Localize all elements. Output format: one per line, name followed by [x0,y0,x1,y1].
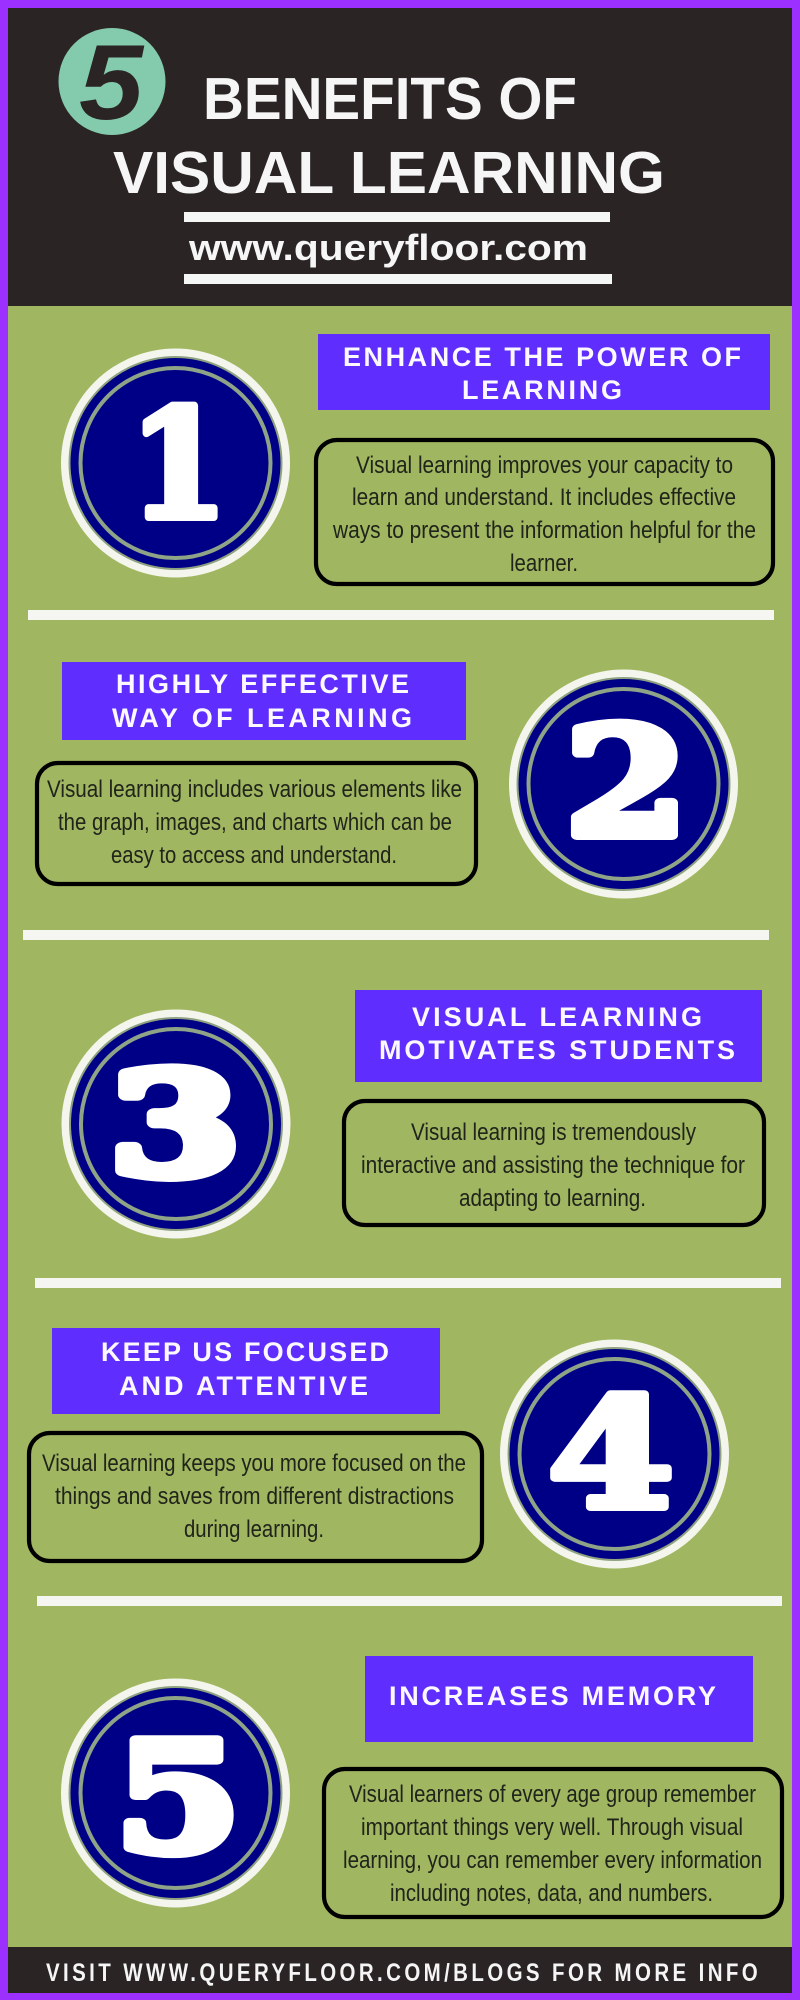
text box 1: Visual learning improves your capacity to [356,452,733,479]
text box 2: Visual learning includes various elements like [47,776,462,803]
number badge 2 [509,670,738,898]
heading 1 [318,334,770,410]
panel: benefit 4 [29,1328,729,1568]
text box 2 [37,763,476,884]
heading 3: MOTIVATES STUDENTS [379,1035,735,1065]
text box 1 [316,440,773,584]
panel: benefit 2 [37,662,738,898]
text box 4: things and saves from different distractions [55,1483,454,1510]
text box 3 [344,1101,764,1225]
text box 4: during learning. [184,1516,324,1543]
number badge 1 [61,348,290,578]
text box 3: adapting to learning. [459,1185,646,1212]
panel: benefit 1 [61,334,773,584]
text box 2: easy to access and understand. [111,842,397,869]
heading 2: WAY OF LEARNING [112,703,412,733]
heading 4: AND ATTENTIVE [119,1371,368,1401]
title: VISUAL LEARNING [113,140,665,206]
text box 4 [29,1433,482,1561]
number badge 2: 2 [565,695,688,871]
number badge 4 [500,1340,729,1568]
number badge 4: 4 [548,1364,674,1543]
text box 1: learner. [510,550,578,577]
footer [8,1947,792,1993]
icon: numeral five badge: 5 [79,22,145,142]
website address: www.queryfloor.com [188,227,588,268]
heading 1: ENHANCE THE POWER OF [343,342,741,372]
heading 1: LEARNING [462,375,622,405]
number badge 3: 3 [110,1043,240,1208]
text box 1: learn and understand. It includes effective [352,484,736,511]
heading 3: VISUAL LEARNING [412,1002,702,1032]
footer: VISIT WWW.QUERYFLOOR.COM/BLOGS FOR MORE INFO [46,1958,758,1986]
panel: benefit 5 [61,1656,782,1917]
heading 5 [365,1656,753,1742]
heading 3 [355,990,762,1082]
icon: numeral five badge [58,22,166,142]
number badge 5: 5 [114,1708,242,1887]
number badge 1: 1 [129,377,228,553]
heading 4 [52,1328,440,1414]
heading 2 [62,662,466,740]
header panel [8,8,792,306]
text box 5 [324,1769,782,1917]
text box 2: the graph, images, and charts which can be [58,809,452,836]
text box 5: including notes, data, and numbers. [390,1880,713,1907]
text box 3: Visual learning is tremendously [411,1119,696,1146]
number badge 3 [62,1010,290,1238]
heading 4: KEEP US FOCUSED [101,1337,389,1367]
text box 3: interactive and assisting the technique for [361,1152,745,1179]
title [113,66,665,206]
title: BENEFITS OF [203,66,577,132]
text box 5: important things very well. Through visual [361,1814,743,1841]
heading 5: INCREASES MEMORY [389,1681,716,1711]
panel: benefit 3 [62,990,764,1238]
text box 4: Visual learning keeps you more focused on the [42,1450,466,1477]
number badge 5 [61,1678,290,1908]
heading 2: HIGHLY EFFECTIVE [116,669,409,699]
